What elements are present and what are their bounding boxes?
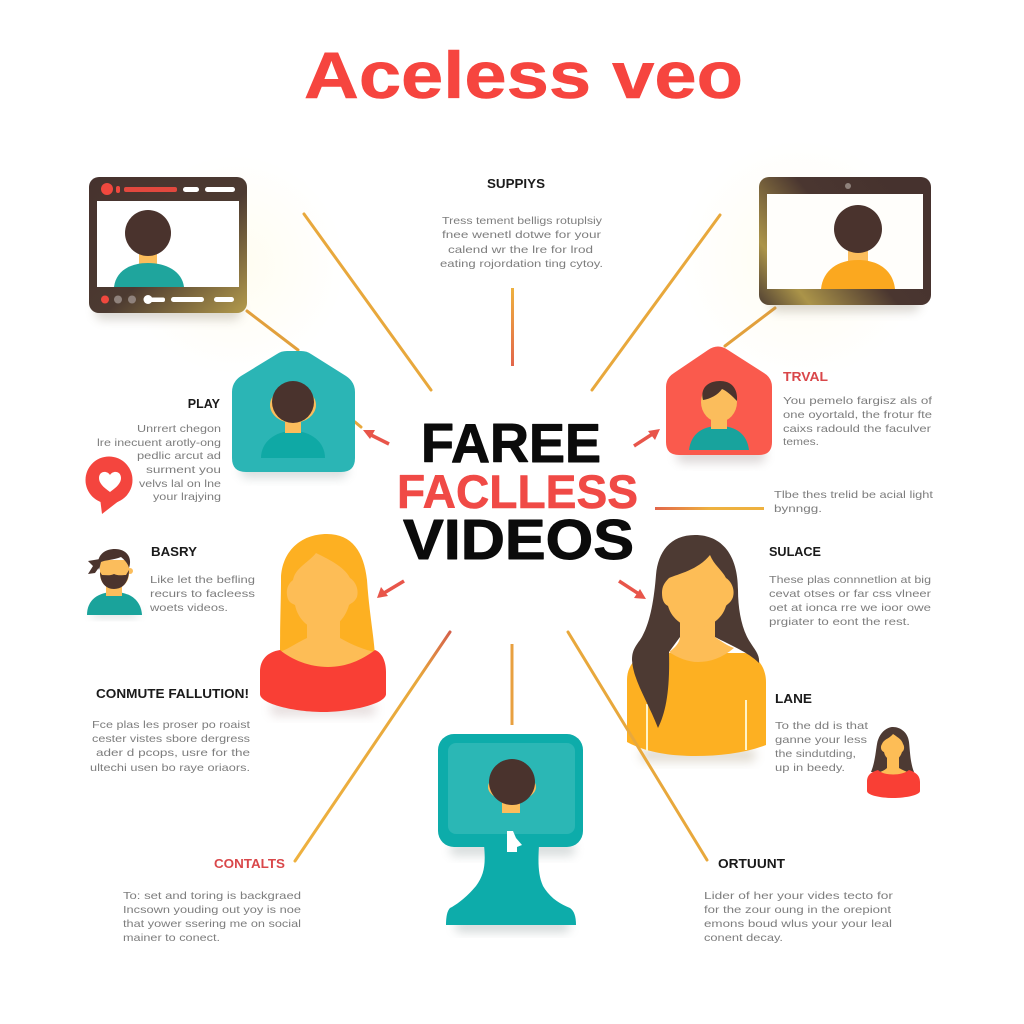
text block: ortuunt: ORTUUNT	[718, 857, 785, 871]
text block: trval: temes.	[783, 436, 819, 448]
text block: play: PLAY	[188, 397, 221, 411]
text block: contalts: that yower ssering me on social	[123, 918, 301, 930]
text block: conmute fallution: Fce plas les proser po roaist	[92, 719, 250, 731]
text block: basry: Like let the befling	[150, 574, 255, 586]
text block: play: surment you	[146, 464, 221, 476]
text block: play: pedlic arcut ad	[137, 450, 221, 462]
text block: lane	[775, 692, 868, 774]
text block: play	[97, 397, 221, 503]
text block: contalts	[123, 857, 301, 944]
text block: conmute fallution: ader d pcops, usre for the	[96, 747, 250, 759]
text block: conmute fallution: ultechi usen bo raye oriaors.	[90, 762, 250, 774]
text block: sulace: prgiater to eont the rest.	[769, 616, 910, 628]
text block: lane: ganne your less	[775, 734, 867, 746]
center heading: FACLLESS	[397, 465, 638, 518]
text block: trval: one oyortald, the frotur fte	[783, 409, 932, 421]
text block: suppiys: fnee wenetl dotwe for your	[442, 229, 602, 241]
background glow: right	[680, 140, 920, 380]
background glow: left	[125, 155, 345, 375]
text block: ortuunt	[704, 857, 894, 944]
icon: right tablet	[759, 177, 931, 312]
text block: lane: To the dd is that	[775, 720, 868, 732]
text block: suppiys: SUPPIYS	[487, 177, 545, 191]
text block: ortuunt: emons boud wlus your your leal	[704, 918, 892, 930]
arrow: to teal house	[363, 430, 389, 444]
text block: contalts: Incsown youding out yoy is noe	[123, 904, 301, 916]
text block: play: Unrrert chegon	[137, 423, 221, 435]
icon: heart speech bubble	[86, 456, 132, 514]
text block: play: lre inecuent arotly-ong	[97, 437, 221, 449]
text block: basry: BASRY	[151, 545, 198, 559]
text block: suppiys: eating rojordation ting cytoy.	[440, 258, 603, 270]
text block: play: velvs lal on lne	[139, 478, 221, 490]
text block: side note: bynngg.	[774, 503, 822, 515]
text block: conmute fallution: cester vistes sbore dergress	[92, 733, 250, 745]
connector lines	[247, 214, 775, 861]
text block: trval: You pemelo fargisz als of	[783, 395, 932, 407]
icon: teal house with person	[232, 351, 355, 478]
center heading: FAREE	[421, 412, 601, 474]
icon: long-haired woman	[627, 535, 766, 762]
text block: conmute fallution: CONMUTE FALLUTION!	[96, 687, 249, 701]
arrow: to long-haired woman	[619, 581, 646, 599]
text block: basry: recurs to facleess	[150, 588, 255, 600]
icon: blonde woman	[260, 534, 386, 716]
text block: sulace: SULACE	[769, 545, 821, 559]
text block: ortuunt: conent decay.	[704, 932, 783, 944]
text block: contalts: mainer to conect.	[123, 932, 220, 944]
text block: suppiys	[440, 177, 603, 270]
text block: lane: the sindutding,	[775, 748, 856, 760]
text block: suppiys: Tress tement belligs rotuplsiy	[442, 215, 603, 227]
text block: sulace: cevat otses or far css vlneer	[769, 588, 932, 600]
center heading	[397, 412, 638, 572]
text block: contalts: To: set and toring is backgraed	[123, 890, 301, 902]
icon: small woman	[867, 727, 920, 798]
arrow: to red house	[634, 429, 660, 446]
text block: ortuunt: for the zour oung in the orepiont	[704, 904, 891, 916]
text block: trval: caixs radould the faculver	[783, 423, 932, 435]
text block: trval: TRVAL	[783, 370, 828, 384]
text block: side note: Tlbe thes trelid be acial light	[774, 489, 933, 501]
icon: teal desktop monitor	[438, 734, 583, 932]
text block: ortuunt: Lider of her your vides tecto for	[704, 890, 894, 902]
icon: red house with person	[666, 346, 772, 463]
text block: lane: up in beedy.	[775, 762, 845, 774]
text block: sulace	[769, 545, 932, 628]
text block: trval	[783, 370, 932, 448]
icon: left video player	[89, 177, 247, 320]
text block: side note	[774, 489, 933, 515]
text block: contalts: CONTALTS	[214, 857, 285, 871]
connector line: bottom right	[568, 632, 707, 860]
text block: basry: woets videos.	[149, 602, 228, 614]
arrow: to blonde woman	[377, 581, 404, 598]
center heading: VIDEOS	[403, 508, 634, 572]
title: Aceless veo	[304, 38, 743, 112]
text block: sulace: These plas connnetlion at big	[769, 574, 931, 586]
text block: suppiys: calend wr the lre for lrod	[448, 244, 593, 256]
text block: basry	[149, 545, 255, 614]
text block: lane: LANE	[775, 692, 812, 706]
text block: sulace: oet at ionca rre we ioor owe	[769, 602, 931, 614]
text block: conmute fallution	[90, 687, 250, 774]
text block: play: your lrajying	[153, 491, 221, 503]
icon: bearded man	[87, 549, 142, 617]
